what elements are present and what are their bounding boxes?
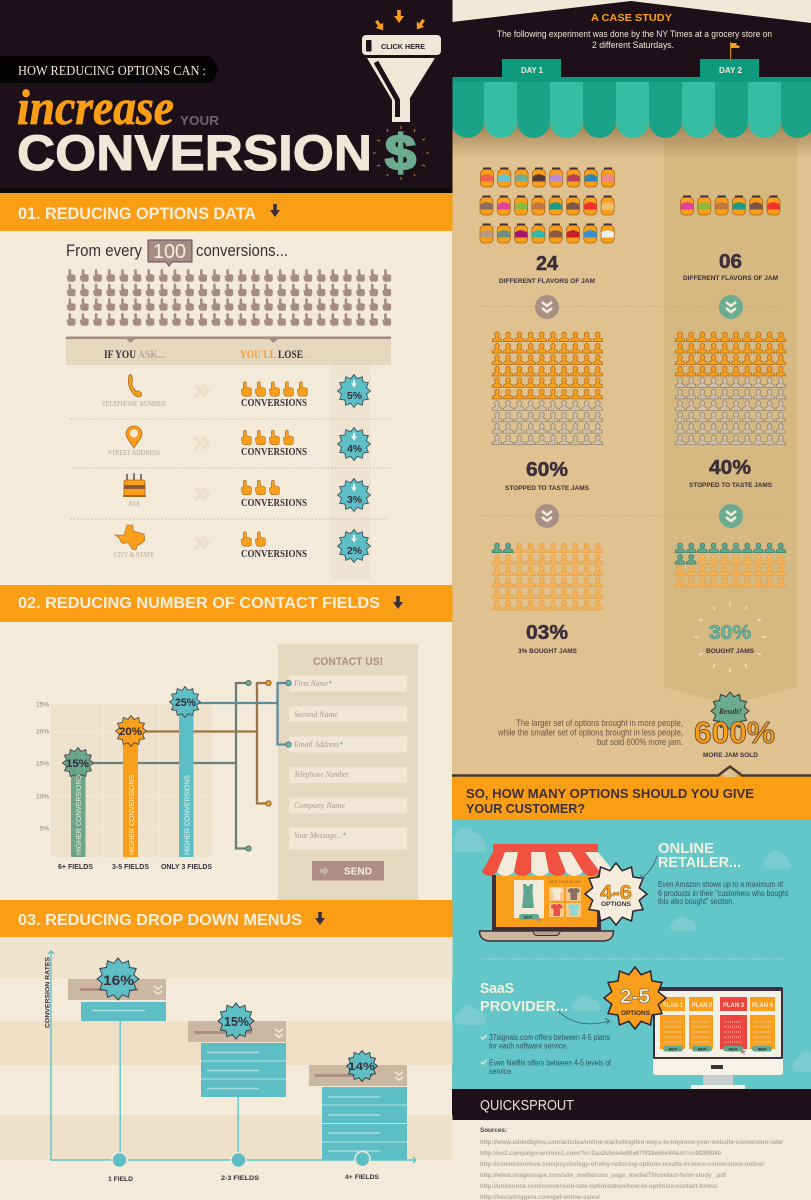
pricing plan columns: BUY	[698, 1046, 707, 1052]
text: result summary: but sold 600% more jam.	[597, 737, 683, 747]
text: case study intro	[497, 29, 772, 51]
x axis marker: 4+ fields: 4+ FIELDS	[345, 1174, 379, 1181]
badge: 4-6 options	[585, 863, 647, 925]
sources list: Sources:	[480, 1127, 507, 1134]
table header: IF YOU	[104, 347, 136, 361]
text: online retailer description	[658, 880, 789, 906]
stat: 03% bought: 3% BOUGHT JAMS	[518, 648, 578, 655]
table header: YOU'LL	[240, 347, 276, 361]
section heading 01	[0, 193, 452, 231]
connector lines	[90, 683, 288, 848]
contact form: First Name*	[293, 678, 333, 688]
icon: chevron down day 2 lower	[719, 504, 743, 528]
text: case study intro: 2 different Saturdays.	[592, 40, 674, 51]
contact form	[278, 644, 418, 900]
jam jars: day 2	[680, 196, 780, 215]
section heading 02: 02. REDUCING NUMBER OF CONTACT FIELDS	[18, 595, 380, 612]
heading: from every 100 conversions: conversions...	[196, 242, 288, 260]
text: result summary: while the smaller set of options brought in less people,	[497, 728, 683, 738]
stat: 60%	[505, 459, 590, 492]
contact form: Second Name	[294, 709, 338, 719]
pricing plan columns	[660, 997, 775, 1055]
axis title: CONVERSION RATES	[44, 957, 52, 1028]
bar: 6+ fields: HIGHER CONVERSIONS	[74, 775, 83, 855]
row: city and state: CONVERSIONS	[241, 549, 307, 560]
day 2 column	[664, 138, 797, 705]
panel: options teal	[450, 819, 811, 1089]
jam jars: day 1	[480, 168, 615, 243]
panel: reducing options data	[66, 240, 391, 580]
clouds	[450, 827, 811, 1072]
label: more jam sold: MORE JAM SOLD	[703, 752, 758, 759]
table header: ...	[304, 347, 310, 361]
badge: 2-5 options: OPTIONS	[621, 1010, 650, 1017]
icon: chevron down day 1 lower	[535, 504, 559, 528]
people grid: day 1 tasted 60	[492, 332, 603, 445]
badge: 2-5 options: 2-5	[620, 986, 650, 1008]
title ribbon	[0, 56, 219, 83]
table header	[66, 336, 391, 365]
icon: dollar sign: $	[385, 125, 416, 181]
stat: 30% bought: 30%	[709, 622, 751, 644]
icon: click arrows	[373, 10, 427, 33]
sources list: http://conversionlove.com/psychology-of-why-reducing-options-results-in-more-conversions-online/	[480, 1162, 764, 1168]
row: telephone number: 5%	[347, 391, 362, 402]
icon: storefront laptop	[480, 844, 614, 941]
panel: case study	[451, 0, 811, 777]
icon: chevron down day 2 upper	[719, 295, 743, 319]
store roof	[452, 1, 811, 80]
hand icon grid	[67, 269, 391, 326]
heading: saas provider: PROVIDER...	[480, 999, 568, 1015]
product card: BUY	[524, 914, 533, 920]
badge: 4-6 options: 4-6	[600, 882, 632, 904]
connector dots	[246, 680, 291, 851]
heading: from every 100 conversions	[66, 240, 288, 266]
contact form: Telephone Number	[294, 769, 350, 779]
grid background	[51, 704, 212, 857]
row: city and state: CITY & STATE	[114, 552, 154, 559]
stat: 40%: STOPPED TO TASTE JAMS	[689, 482, 773, 489]
pricing plan columns: BUY	[729, 1046, 738, 1052]
row: telephone number: TELEPHONE NUMBER	[102, 401, 166, 408]
heading: a case study: A CASE STUDY	[591, 12, 672, 24]
icon: funnel with click button	[362, 35, 441, 122]
text: saas bullets	[481, 1033, 612, 1076]
heading: online retailer	[658, 841, 741, 871]
y axis labels	[36, 702, 49, 832]
drop down: 1 field: 1 FIELD	[108, 1176, 133, 1183]
text: saas bullets: 37signals.com offers between 4-5 plans	[489, 1033, 610, 1042]
heading: online retailer: ONLINE	[658, 841, 714, 857]
dotted dividers	[480, 306, 785, 516]
panel: contact fields chart	[36, 644, 418, 900]
drop down: 2-3 fields: 2-3 FIELDS	[221, 1175, 259, 1182]
send button	[312, 861, 384, 880]
stat: 24 flavors	[499, 253, 595, 285]
text: online retailer description: this also bought" section.	[658, 897, 734, 906]
badge: result	[711, 692, 749, 730]
title ribbon: HOW REDUCING OPTIONS CAN :	[18, 64, 206, 79]
pricing plan columns: BUY	[669, 1046, 678, 1052]
panel: how many options heading: SO, HOW MANY OPTIONS SHOULD YOU GIVE	[466, 786, 754, 801]
y axis labels: 20%	[36, 728, 49, 736]
pricing plan columns: PLAN 4	[752, 1002, 773, 1009]
drop down: 1 field: 16%	[103, 972, 135, 988]
row: telephone number: CONVERSIONS	[241, 398, 307, 409]
pricing plan columns: PLAN 2	[692, 1002, 712, 1009]
row: city and state	[114, 525, 370, 562]
x axis labels	[58, 864, 212, 871]
panel: how many options heading: YOUR CUSTOMER?	[466, 801, 585, 816]
text: result summary: The larger set of options brought in more people,	[516, 718, 683, 728]
axes	[48, 951, 416, 1163]
text: saas bullets: Even Netflix offers between 4-5 levels of	[489, 1058, 612, 1068]
stat: 06 flavors	[683, 251, 778, 282]
stat: 40%: 40%	[709, 457, 751, 479]
text: saas bullets: for each software service.	[489, 1042, 568, 1050]
row: street address: 4%	[347, 444, 362, 455]
heading: saas provider: SaaS	[480, 981, 514, 997]
people grid: day 1 bought 3	[492, 543, 603, 610]
bar: 3-5 fields	[116, 716, 146, 857]
stat: 06 flavors: DIFFERENT FLAVORS OF JAM	[683, 275, 778, 282]
people grid: day 2 bought 30	[675, 543, 786, 587]
text: case study intro: The following experiment was done by the NY Times at a grocery store on	[497, 29, 772, 40]
section heading 03: 03. REDUCING DROP DOWN MENUS	[18, 912, 302, 929]
badge: result: Result?	[718, 707, 742, 716]
stat: 40%	[689, 457, 773, 489]
icon: chevron down day 1 upper	[535, 295, 559, 319]
drop down: 1 field	[68, 958, 166, 1183]
sources list: http://unbounce.com/conversion-rate-optimization/how-to-optimize-contact-forms/	[480, 1184, 718, 1190]
row: age	[123, 473, 370, 512]
x axis labels: ONLY 3 FIELDS	[161, 864, 212, 871]
awning	[451, 59, 811, 138]
sources list: http://www.addedbytes.com/articles/online-marketing/ten-ways-to-improve-your-website-conversion-rate/	[480, 1140, 783, 1146]
heading: saas provider	[480, 981, 568, 1015]
drop down: 4+ fields	[309, 1050, 407, 1160]
row: age: 3%	[347, 495, 362, 506]
y axis labels: 5%	[40, 826, 49, 832]
thumbnail products: SEE THIS ALSO	[549, 880, 581, 884]
panel: how many options heading	[452, 766, 811, 820]
pricing plan columns: PLAN 1	[663, 1002, 683, 1009]
title: increase: increase	[17, 79, 174, 135]
panel: drop down chart	[44, 951, 416, 1183]
icon: desktop monitor with plans	[653, 987, 783, 1089]
stat: 06 flavors: 06	[719, 251, 742, 273]
drop down: 4+ fields: 14%	[348, 1061, 375, 1073]
text: online retailer description: 6 products in their "customers who bought	[658, 889, 789, 898]
row: street address: STREET ADDRESS	[108, 450, 160, 457]
icon: flag	[730, 42, 740, 60]
sources list	[480, 1127, 783, 1200]
y axis labels: 25%	[36, 702, 49, 708]
bar: 6+ fields	[62, 748, 94, 857]
bar: only 3 fields: HIGHER CONVERSIONS	[182, 775, 192, 855]
title: conversion: CONVERSION	[17, 125, 372, 181]
row: city and state: 2%	[347, 546, 362, 557]
arrow: saas provider	[558, 1011, 610, 1024]
bar: only 3 fields	[170, 686, 200, 857]
stat: 30% bought	[694, 601, 766, 673]
stat: 24 flavors: 24	[536, 253, 559, 275]
y axis labels: 15%	[36, 760, 49, 768]
heading: from every 100 conversions: From every	[66, 242, 143, 260]
heading: online retailer: RETAILER...	[658, 855, 741, 871]
x axis labels: 3-5 FIELDS	[112, 864, 149, 871]
table header: ASK...	[138, 347, 165, 361]
x axis marker: 4+ fields	[345, 1152, 379, 1181]
contact form: Your Message...*	[294, 830, 347, 840]
stat: 24 flavors: DIFFERENT FLAVORS OF JAM	[499, 278, 595, 285]
row: street address: CONVERSIONS	[241, 447, 307, 458]
stat: 30% bought: BOUGHT JAMS	[706, 648, 755, 655]
sources list: http://www.imagescape.com/site_media/cms_page_media/70/contact-form-study_.pdf	[480, 1173, 727, 1179]
section 3 background bands	[0, 937, 452, 1160]
title: your: YOUR	[180, 113, 220, 128]
row: age: CONVERSIONS	[241, 498, 307, 509]
y axis labels: 10%	[36, 794, 49, 800]
laptop base	[480, 931, 614, 941]
drop down: 2-3 fields	[188, 1003, 286, 1182]
drop down: 2-3 fields: 15%	[224, 1015, 249, 1029]
send button: SEND	[344, 866, 372, 878]
footer: quicksprout: QUICKSPROUT	[480, 1098, 574, 1114]
section heading 03	[0, 900, 452, 937]
bar: only 3 fields: 25%	[175, 697, 196, 709]
section heading 02	[0, 585, 452, 622]
bar: 6+ fields: 15%	[66, 758, 89, 770]
sources list: http://us2.campaign-archive1.com/?u=2aa2c0ea4e80a67f928e66e94&id=cc9f289040	[480, 1151, 722, 1157]
badge: 4-6 options: OPTIONS	[601, 901, 631, 908]
footer: quicksprout	[452, 1089, 811, 1120]
label: day 2: DAY 2	[719, 65, 742, 75]
contact form: Email Address*	[293, 739, 344, 749]
row: age: AGE	[128, 501, 140, 508]
badge: 2-5 options	[604, 967, 666, 1029]
contact form: CONTACT US!	[313, 656, 383, 668]
x axis labels: 6+ FIELDS	[58, 864, 93, 871]
icon: funnel with click button: CLICK HERE	[381, 42, 425, 51]
row: street address	[108, 426, 370, 460]
bar: 3-5 fields: HIGHER CONVERSIONS	[127, 775, 136, 855]
text: online retailer description: Even Amazon shows up to a maximum of	[658, 880, 784, 889]
striped awning	[482, 844, 611, 876]
pricing plan columns: BUY	[758, 1046, 767, 1052]
pricing plan columns: PLAN 3	[723, 1002, 744, 1009]
contact form: Company Name	[294, 800, 345, 810]
stat: 60%: STOPPED TO TASTE JAMS	[505, 485, 590, 492]
chevrons	[195, 385, 208, 549]
icon: dollar sign	[373, 125, 429, 181]
arrow: online retailer	[641, 856, 657, 878]
stat: 03% bought	[518, 622, 578, 655]
stat: 60%: 60%	[526, 459, 568, 481]
text: saas bullets: service.	[489, 1067, 513, 1076]
bar: 3-5 fields: 20%	[119, 726, 142, 738]
row: telephone number	[102, 374, 370, 409]
label: day 1: DAY 1	[521, 65, 543, 75]
section heading 01: 01. REDUCING OPTIONS DATA	[18, 204, 256, 223]
table header: LOSE	[278, 347, 303, 361]
panel: title header	[0, 0, 452, 193]
heading: from every 100 conversions: 100	[153, 241, 186, 263]
stat: 600%: 600%	[694, 715, 775, 750]
stat: 03% bought: 03%	[526, 622, 568, 644]
people grid: day 2 tasted 40	[675, 332, 786, 445]
text: result summary	[497, 718, 683, 747]
